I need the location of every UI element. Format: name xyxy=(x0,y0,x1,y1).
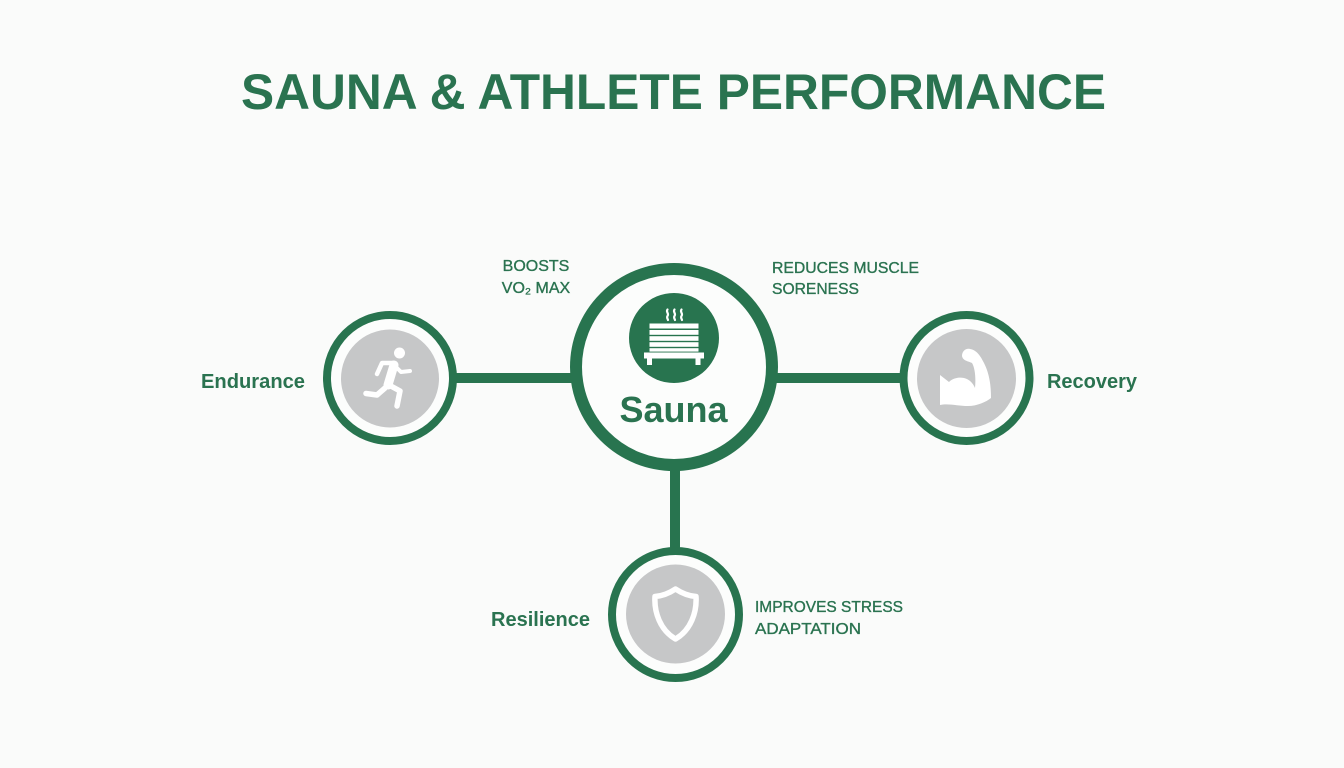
note: boosts VO2 max xyxy=(502,258,571,297)
label: endurance: Endurance xyxy=(201,371,305,393)
label: recovery: Recovery xyxy=(1047,371,1138,393)
node: resilience xyxy=(612,551,739,678)
icon: runner xyxy=(366,348,410,406)
node: endurance xyxy=(327,315,453,441)
connector: sauna to endurance xyxy=(455,373,573,383)
title: SAUNA & ATHLETE PERFORMANCE xyxy=(241,64,1106,120)
node: recovery xyxy=(904,315,1030,441)
note: boosts VO2 max: VO₂ MAX xyxy=(502,280,571,297)
note: reduces muscle soreness: REDUCES MUSCLE xyxy=(772,260,919,277)
icon: shield xyxy=(655,589,696,639)
note: reduces muscle soreness xyxy=(772,260,919,298)
label: sauna: Sauna xyxy=(619,389,728,430)
note: improves stress adaptation xyxy=(755,599,903,638)
central node: sauna xyxy=(576,269,772,465)
connector: sauna to resilience xyxy=(670,468,680,550)
label: resilience: Resilience xyxy=(491,609,590,631)
icon: flexed arm xyxy=(940,349,991,406)
note: reduces muscle soreness: SORENESS xyxy=(772,281,859,298)
note: improves stress adaptation: ADAPTATION xyxy=(755,621,861,638)
note: boosts VO2 max: BOOSTS xyxy=(503,258,569,275)
note: improves stress adaptation: IMPROVES STRESS xyxy=(755,599,903,616)
connector: sauna to recovery xyxy=(776,373,902,383)
icon: sauna bench with steam xyxy=(629,293,719,383)
